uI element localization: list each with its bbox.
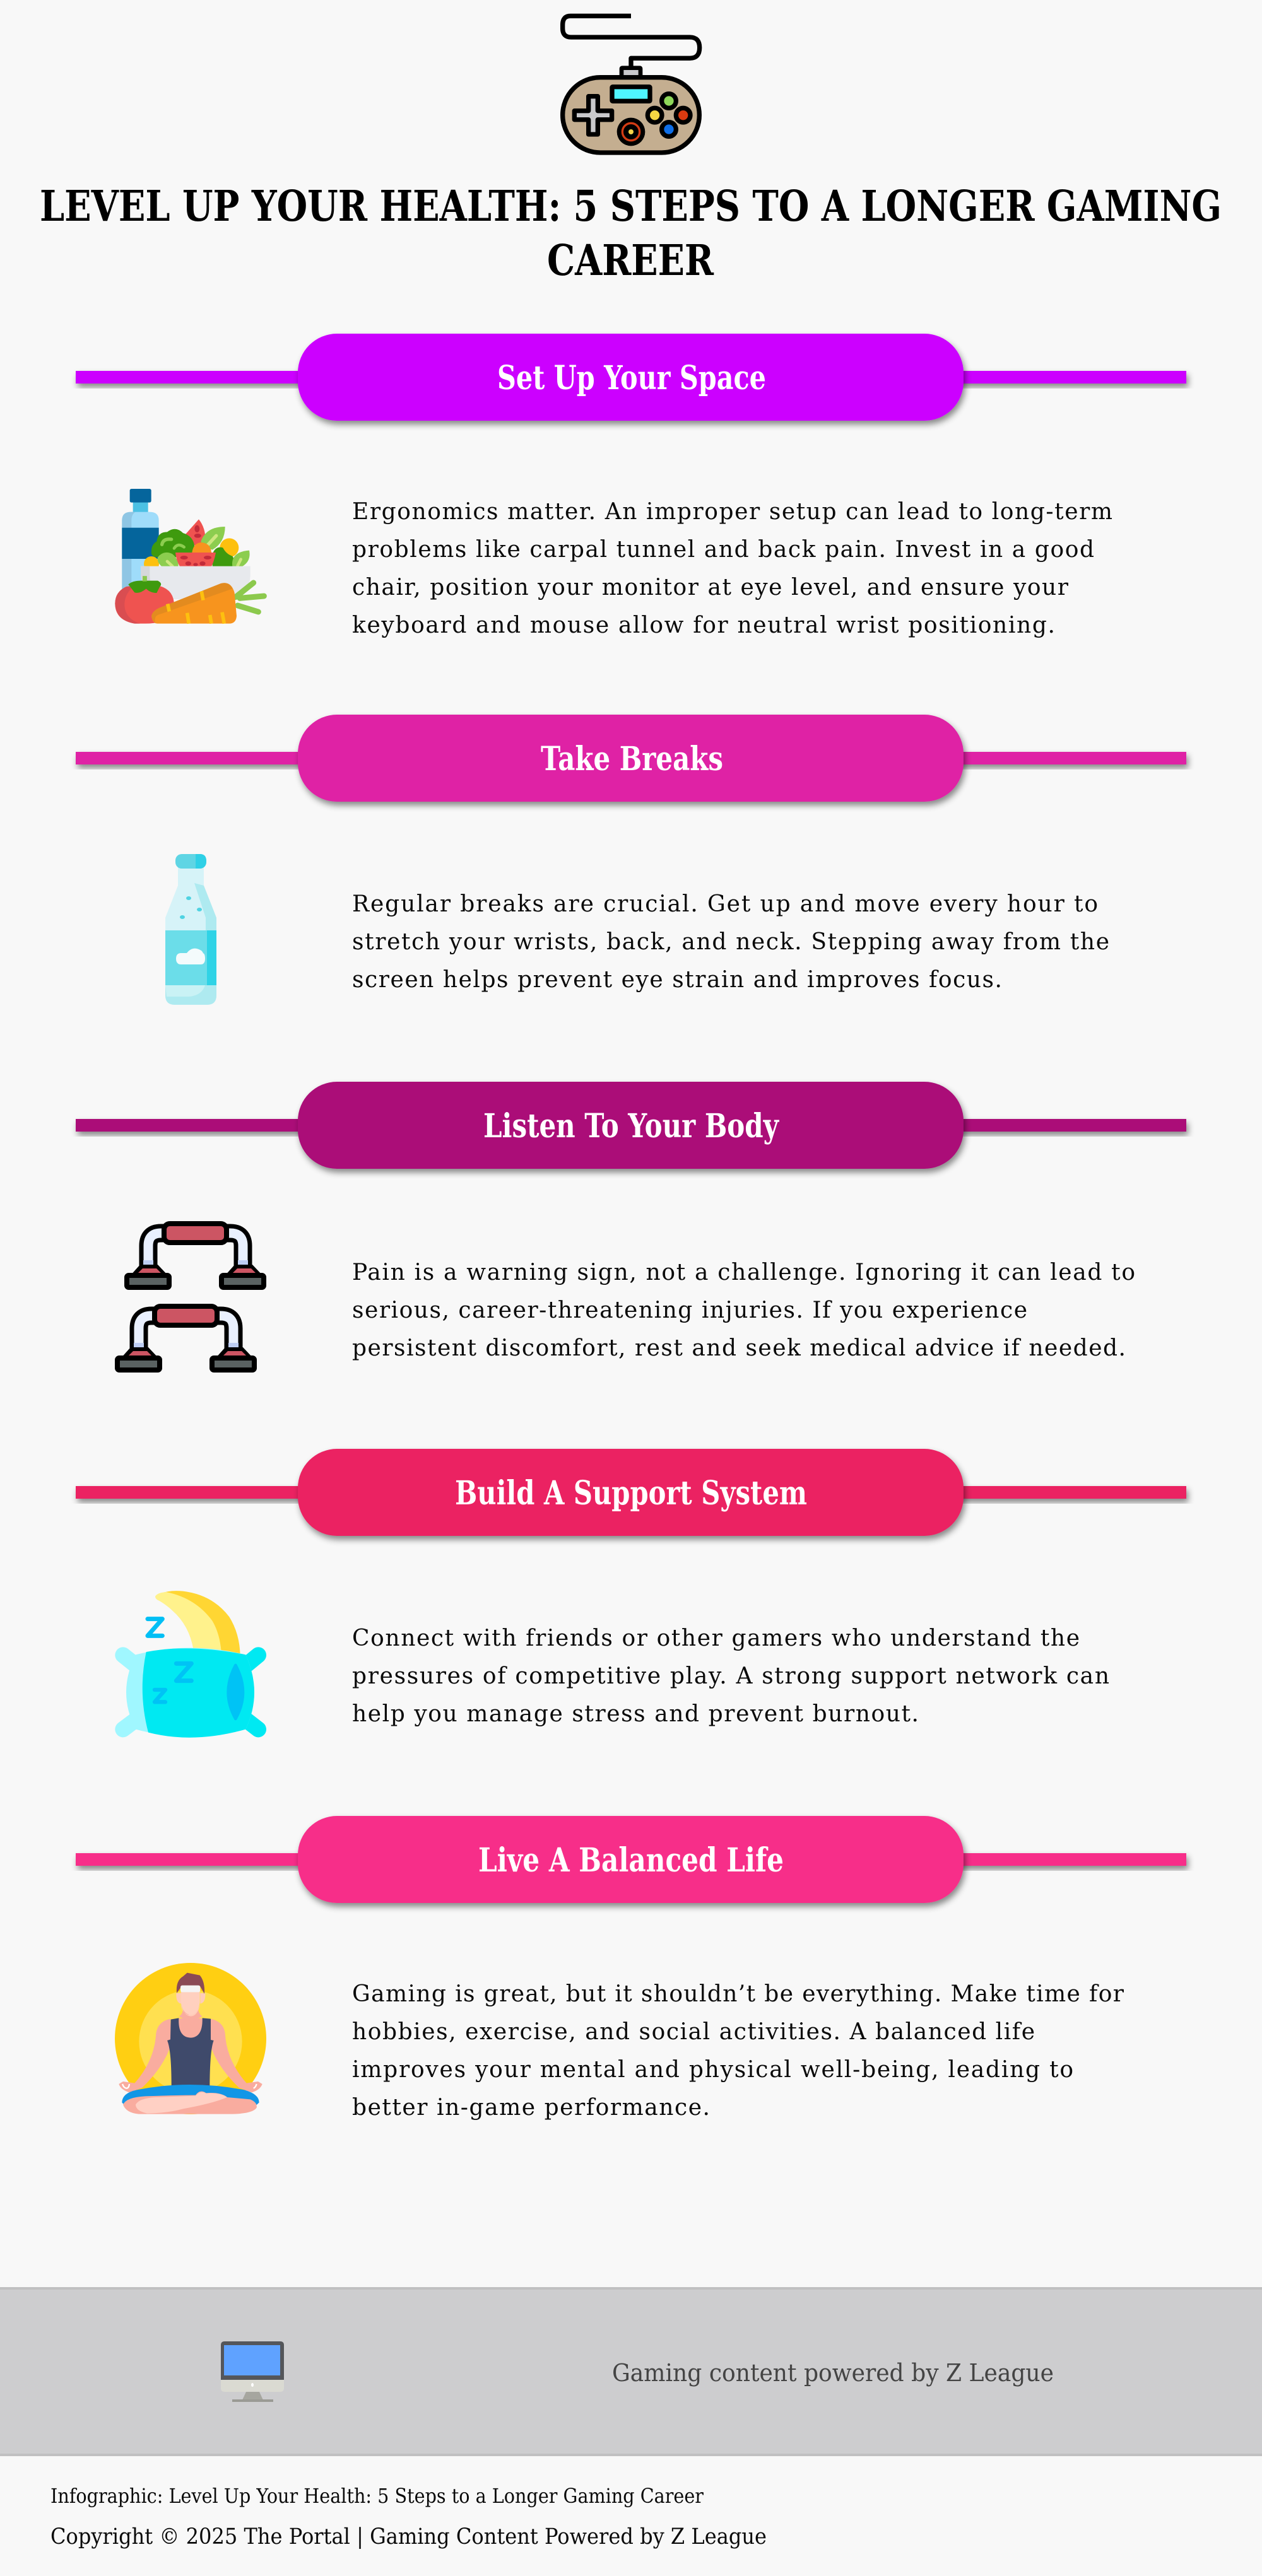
text: balanced life: Gaming is great, but it shouldn’t be everything. Make time for (352, 1981, 1124, 2007)
heading: take breaks: Take Breaks (541, 740, 723, 778)
text: support network (352, 1625, 1109, 1727)
text: support network: pressures of competitive play. A strong support network can (352, 1663, 1109, 1689)
heading: live a balanced life: Live A Balanced Life (478, 1841, 784, 1880)
icon: push-up bars (117, 1224, 264, 1370)
panel: listen to your body (76, 1082, 1186, 1370)
heading: set up your space (76, 334, 1186, 421)
text: sponsor note: Gaming content powered by Z League (612, 2359, 1054, 2387)
icon: pillow and moon (123, 1591, 258, 1738)
text: pain warning: persistent discomfort, rest and seek medical advice if needed. (352, 1335, 1126, 1361)
text: ergonomics: problems like carpal tunnel and back pain. Invest in a good (352, 537, 1094, 563)
text: balanced life: hobbies, exercise, and social activities. A balanced life (352, 2019, 1035, 2045)
icon: water bottle and healthy food (115, 489, 264, 624)
text: pain warning: Pain is a warning sign, not a challenge. Ignoring it can lead to (352, 1260, 1135, 1285)
title (40, 181, 1222, 285)
icon: milk bottle (165, 854, 216, 1005)
text: support network: help you manage stress and prevent burnout. (352, 1701, 919, 1727)
heading: listen to your body: Listen To Your Body (483, 1107, 779, 1145)
heading: take breaks (76, 715, 1186, 802)
text: pain warning: serious, career-threatening injuries. If you experience (352, 1297, 1027, 1323)
title: CAREER (547, 235, 714, 285)
text: ergonomics: Ergonomics matter. An improper setup can lead to long-term (352, 499, 1112, 525)
text: regular breaks: Regular breaks are crucial. Get up and move every hour to (352, 891, 1098, 917)
icon: desktop monitor (221, 2341, 284, 2402)
text: pain warning (352, 1260, 1135, 1361)
text: regular breaks (352, 891, 1109, 993)
panel: sponsor band (0, 2287, 1262, 2456)
heading: listen to your body (76, 1082, 1186, 1169)
text: ergonomics: chair, position your monitor at eye level, and ensure your (352, 575, 1069, 600)
panel: set up your space (76, 334, 1186, 638)
panel: build a support system (76, 1449, 1186, 1738)
footer text: Infographic: Level Up Your Health: 5 Steps to a Longer Gaming Career (50, 2484, 704, 2508)
text: ergonomics (352, 499, 1112, 638)
footer text (50, 2484, 767, 2550)
text: regular breaks: screen helps prevent eye strain and improves focus. (352, 967, 1002, 993)
text: ergonomics: keyboard and mouse allow for neutral wrist positioning. (352, 612, 1055, 638)
text: regular breaks: stretch your wrists, back, and neck. Stepping away from the (352, 929, 1109, 955)
heading: live a balanced life (76, 1816, 1186, 1903)
panel: live a balanced life (76, 1816, 1186, 2121)
heading: build a support system (76, 1449, 1186, 1536)
icon: meditating person (115, 1963, 266, 2114)
heading: set up your space: Set Up Your Space (497, 359, 766, 397)
footer text: Copyright © 2025 The Portal | Gaming Content Powered by Z League (50, 2524, 767, 2550)
text: balanced life: improves your mental and physical well-being, leading to (352, 2057, 1073, 2083)
heading: build a support system: Build A Support System (455, 1474, 807, 1513)
text: balanced life (352, 1981, 1124, 2121)
text: balanced life: better in-game performance. (352, 2095, 710, 2121)
icon: game controller (563, 16, 700, 153)
text: support network: Connect with friends or other gamers who understand the (352, 1625, 1080, 1651)
panel: take breaks (76, 715, 1186, 1005)
